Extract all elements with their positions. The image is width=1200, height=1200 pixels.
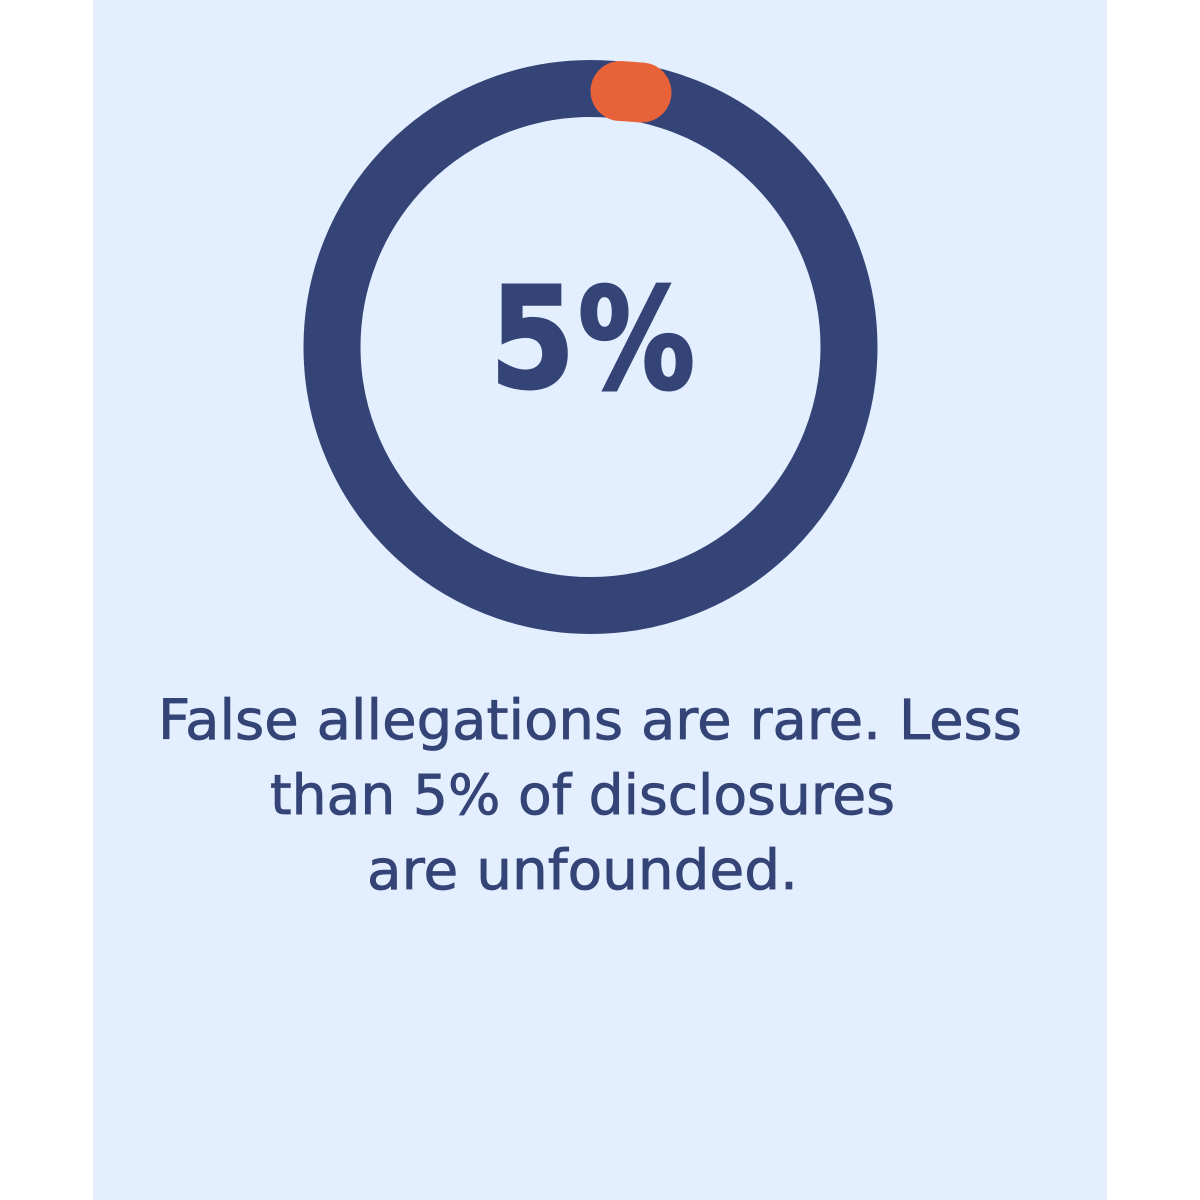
big number: %: [578, 259, 695, 422]
text block: description: are unfounded.: [367, 838, 798, 902]
ring: [332, 88, 849, 606]
big number: 5: [490, 258, 575, 421]
big number: [490, 258, 695, 422]
text block: description: than 5% of disclosures: [270, 763, 895, 827]
highlighted segment: [620, 91, 642, 92]
text block: description: False allegations are rare. Less: [158, 688, 1022, 752]
text block: description: [158, 688, 1022, 902]
